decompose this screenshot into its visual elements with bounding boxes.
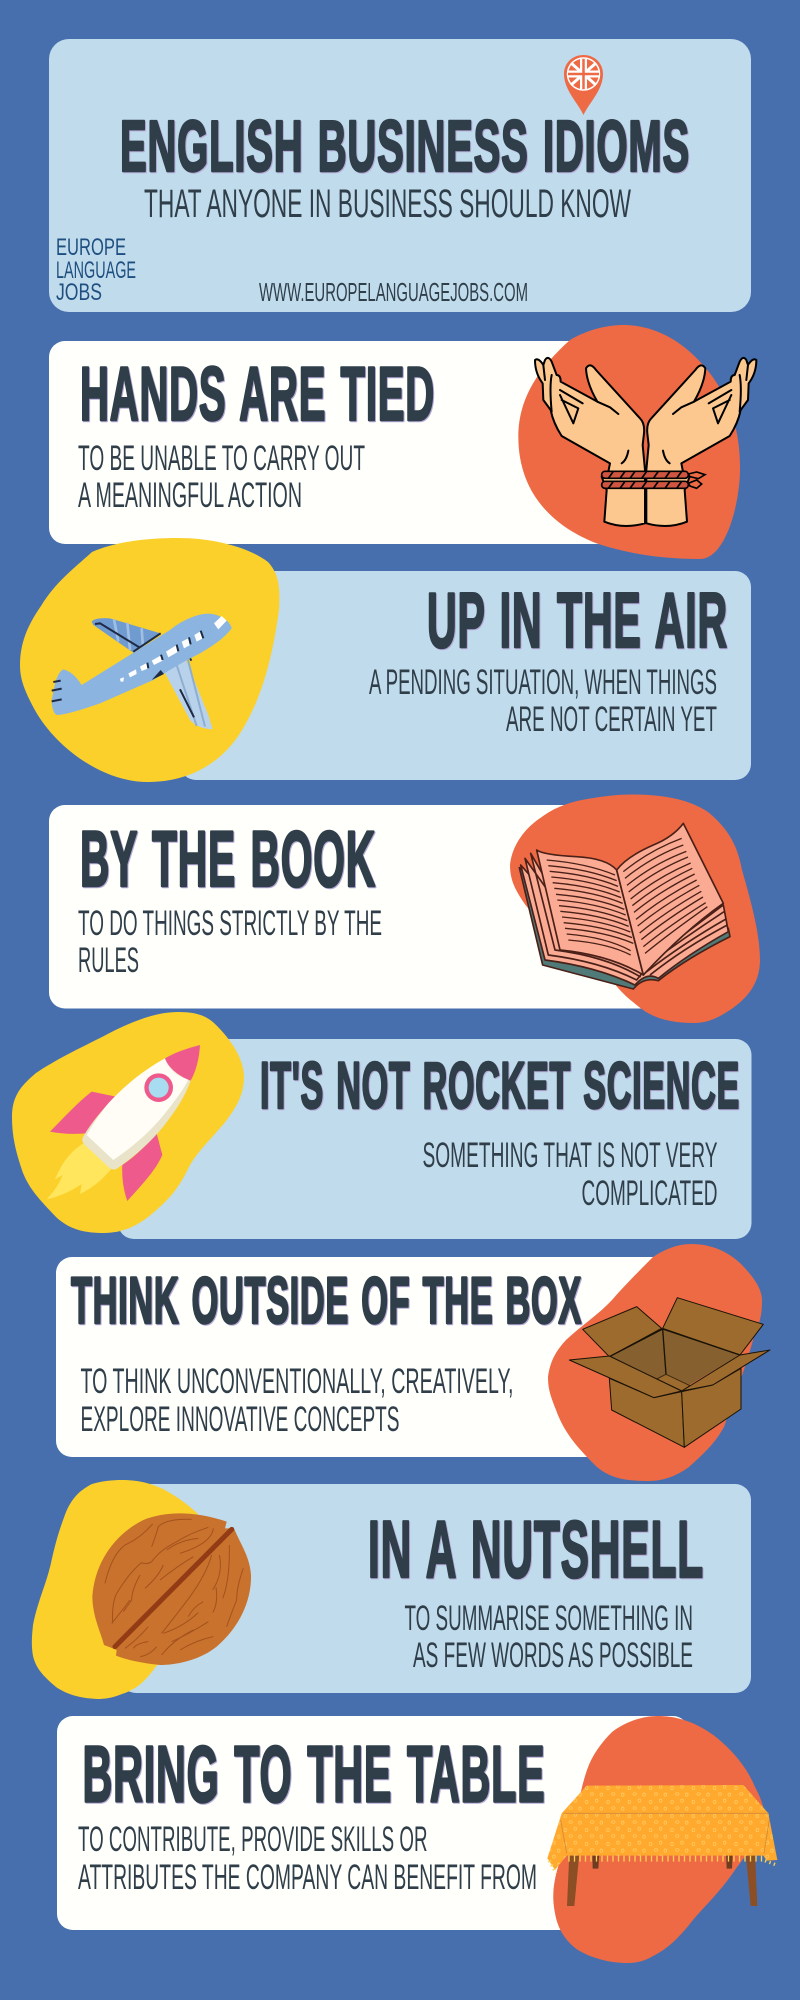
panel: it's not rocket science: [12, 1012, 752, 1239]
description: [78, 904, 382, 980]
icon: UK flag map pin: [564, 55, 603, 115]
icon: rocket on yellow blob: [12, 1012, 244, 1233]
heading: HANDS ARE TIED: [80, 352, 435, 437]
website url: WWW.EUROPELANGUAGEJOBS.COM: [259, 277, 528, 307]
panel: up in the air: [20, 538, 751, 782]
icon: tied hands on orange blob: [518, 325, 756, 559]
description: A MEANINGFUL ACTION: [78, 476, 302, 515]
logo: Europe Language Jobs: [56, 234, 136, 306]
description: TO DO THINGS STRICTLY BY THE: [78, 904, 382, 943]
description: [78, 1820, 537, 1897]
panel: in a nutshell: [32, 1480, 751, 1699]
description: [369, 663, 717, 739]
description: EXPLORE INNOVATIVE CONCEPTS: [80, 1400, 400, 1439]
panel: by the book: [49, 794, 760, 1023]
description: [422, 1136, 718, 1213]
logo: Europe Language Jobs: LANGUAGE: [56, 257, 136, 284]
logo: Europe Language Jobs: EUROPE: [56, 234, 126, 261]
icon: airplane on yellow blob: [20, 538, 279, 782]
icon: cardboard box on orange blob: [548, 1244, 770, 1481]
description: TO CONTRIBUTE, PROVIDE SKILLS OR: [78, 1820, 428, 1859]
heading: BY THE BOOK: [80, 814, 376, 903]
icon: table with orange cloth on orange blob: [547, 1716, 777, 1963]
panel: bring to the table: [57, 1716, 777, 1963]
icon: open book on orange blob: [510, 794, 760, 1023]
logo: Europe Language Jobs: JOBS: [56, 279, 102, 306]
icon: walnut on yellow blob: [32, 1480, 251, 1699]
description: [404, 1599, 693, 1675]
panel: hands are tied: [49, 325, 756, 559]
panel: header: [49, 39, 751, 312]
panel: think outside of the box: [56, 1244, 770, 1481]
description: [78, 439, 365, 515]
description: [80, 1362, 514, 1439]
description: RULES: [78, 941, 139, 980]
description: TO BE UNABLE TO CARRY OUT: [78, 439, 365, 478]
